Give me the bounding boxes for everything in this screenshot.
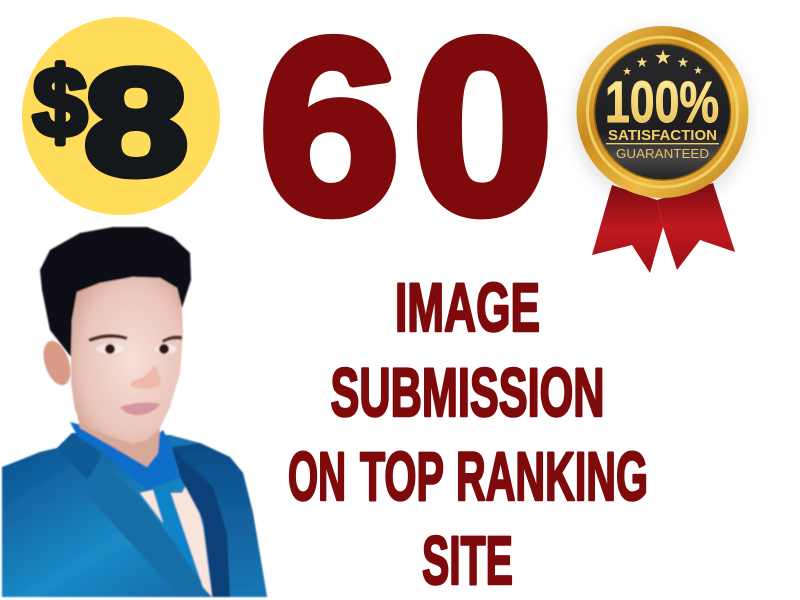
line 4: SITE <box>422 522 513 599</box>
eyebrows <box>88 334 182 343</box>
medal stars: ★ <box>636 55 648 71</box>
jacket right side <box>172 443 267 597</box>
medal stars <box>622 45 703 78</box>
line 3: TOP <box>360 438 444 515</box>
hair <box>40 227 191 357</box>
shirt placket <box>153 490 205 597</box>
shirt collar <box>70 422 180 490</box>
headline text <box>288 269 648 599</box>
medal 100%: 100% <box>605 70 719 135</box>
dollar sign: $ <box>33 47 87 157</box>
line 2: SUBMISSION <box>330 354 604 431</box>
right lapel <box>172 447 230 597</box>
ear <box>38 337 76 389</box>
big number 60 <box>259 0 553 265</box>
left lapel <box>87 460 207 597</box>
medal dark centre <box>594 44 730 180</box>
medal guaranteed: GUARANTEED <box>616 146 709 161</box>
price digit: 8 <box>84 38 188 206</box>
medal satisfaction: SATISFACTION <box>608 127 717 144</box>
portrait <box>2 227 267 597</box>
neck <box>75 395 163 467</box>
satisfaction guarantee medal <box>572 26 752 273</box>
white shirt left <box>140 490 163 523</box>
face <box>71 277 183 444</box>
medal stars: ★ <box>654 45 672 69</box>
left lapel top <box>57 433 100 480</box>
line 1: IMAGE <box>395 269 540 346</box>
nose <box>130 365 161 389</box>
eyes <box>96 344 124 354</box>
price badge <box>22 17 220 215</box>
line 3: RANKING <box>456 438 648 515</box>
medal stars: ★ <box>677 55 689 71</box>
white shirt right <box>170 478 212 597</box>
line 3 <box>288 438 648 515</box>
medal ribbon <box>592 183 735 273</box>
jacket <box>2 433 267 597</box>
medal stars: ★ <box>622 65 632 78</box>
mouth <box>120 403 161 415</box>
medal stars: ★ <box>693 64 703 77</box>
line 3: ON <box>288 438 346 515</box>
medal gold rim <box>576 26 748 198</box>
